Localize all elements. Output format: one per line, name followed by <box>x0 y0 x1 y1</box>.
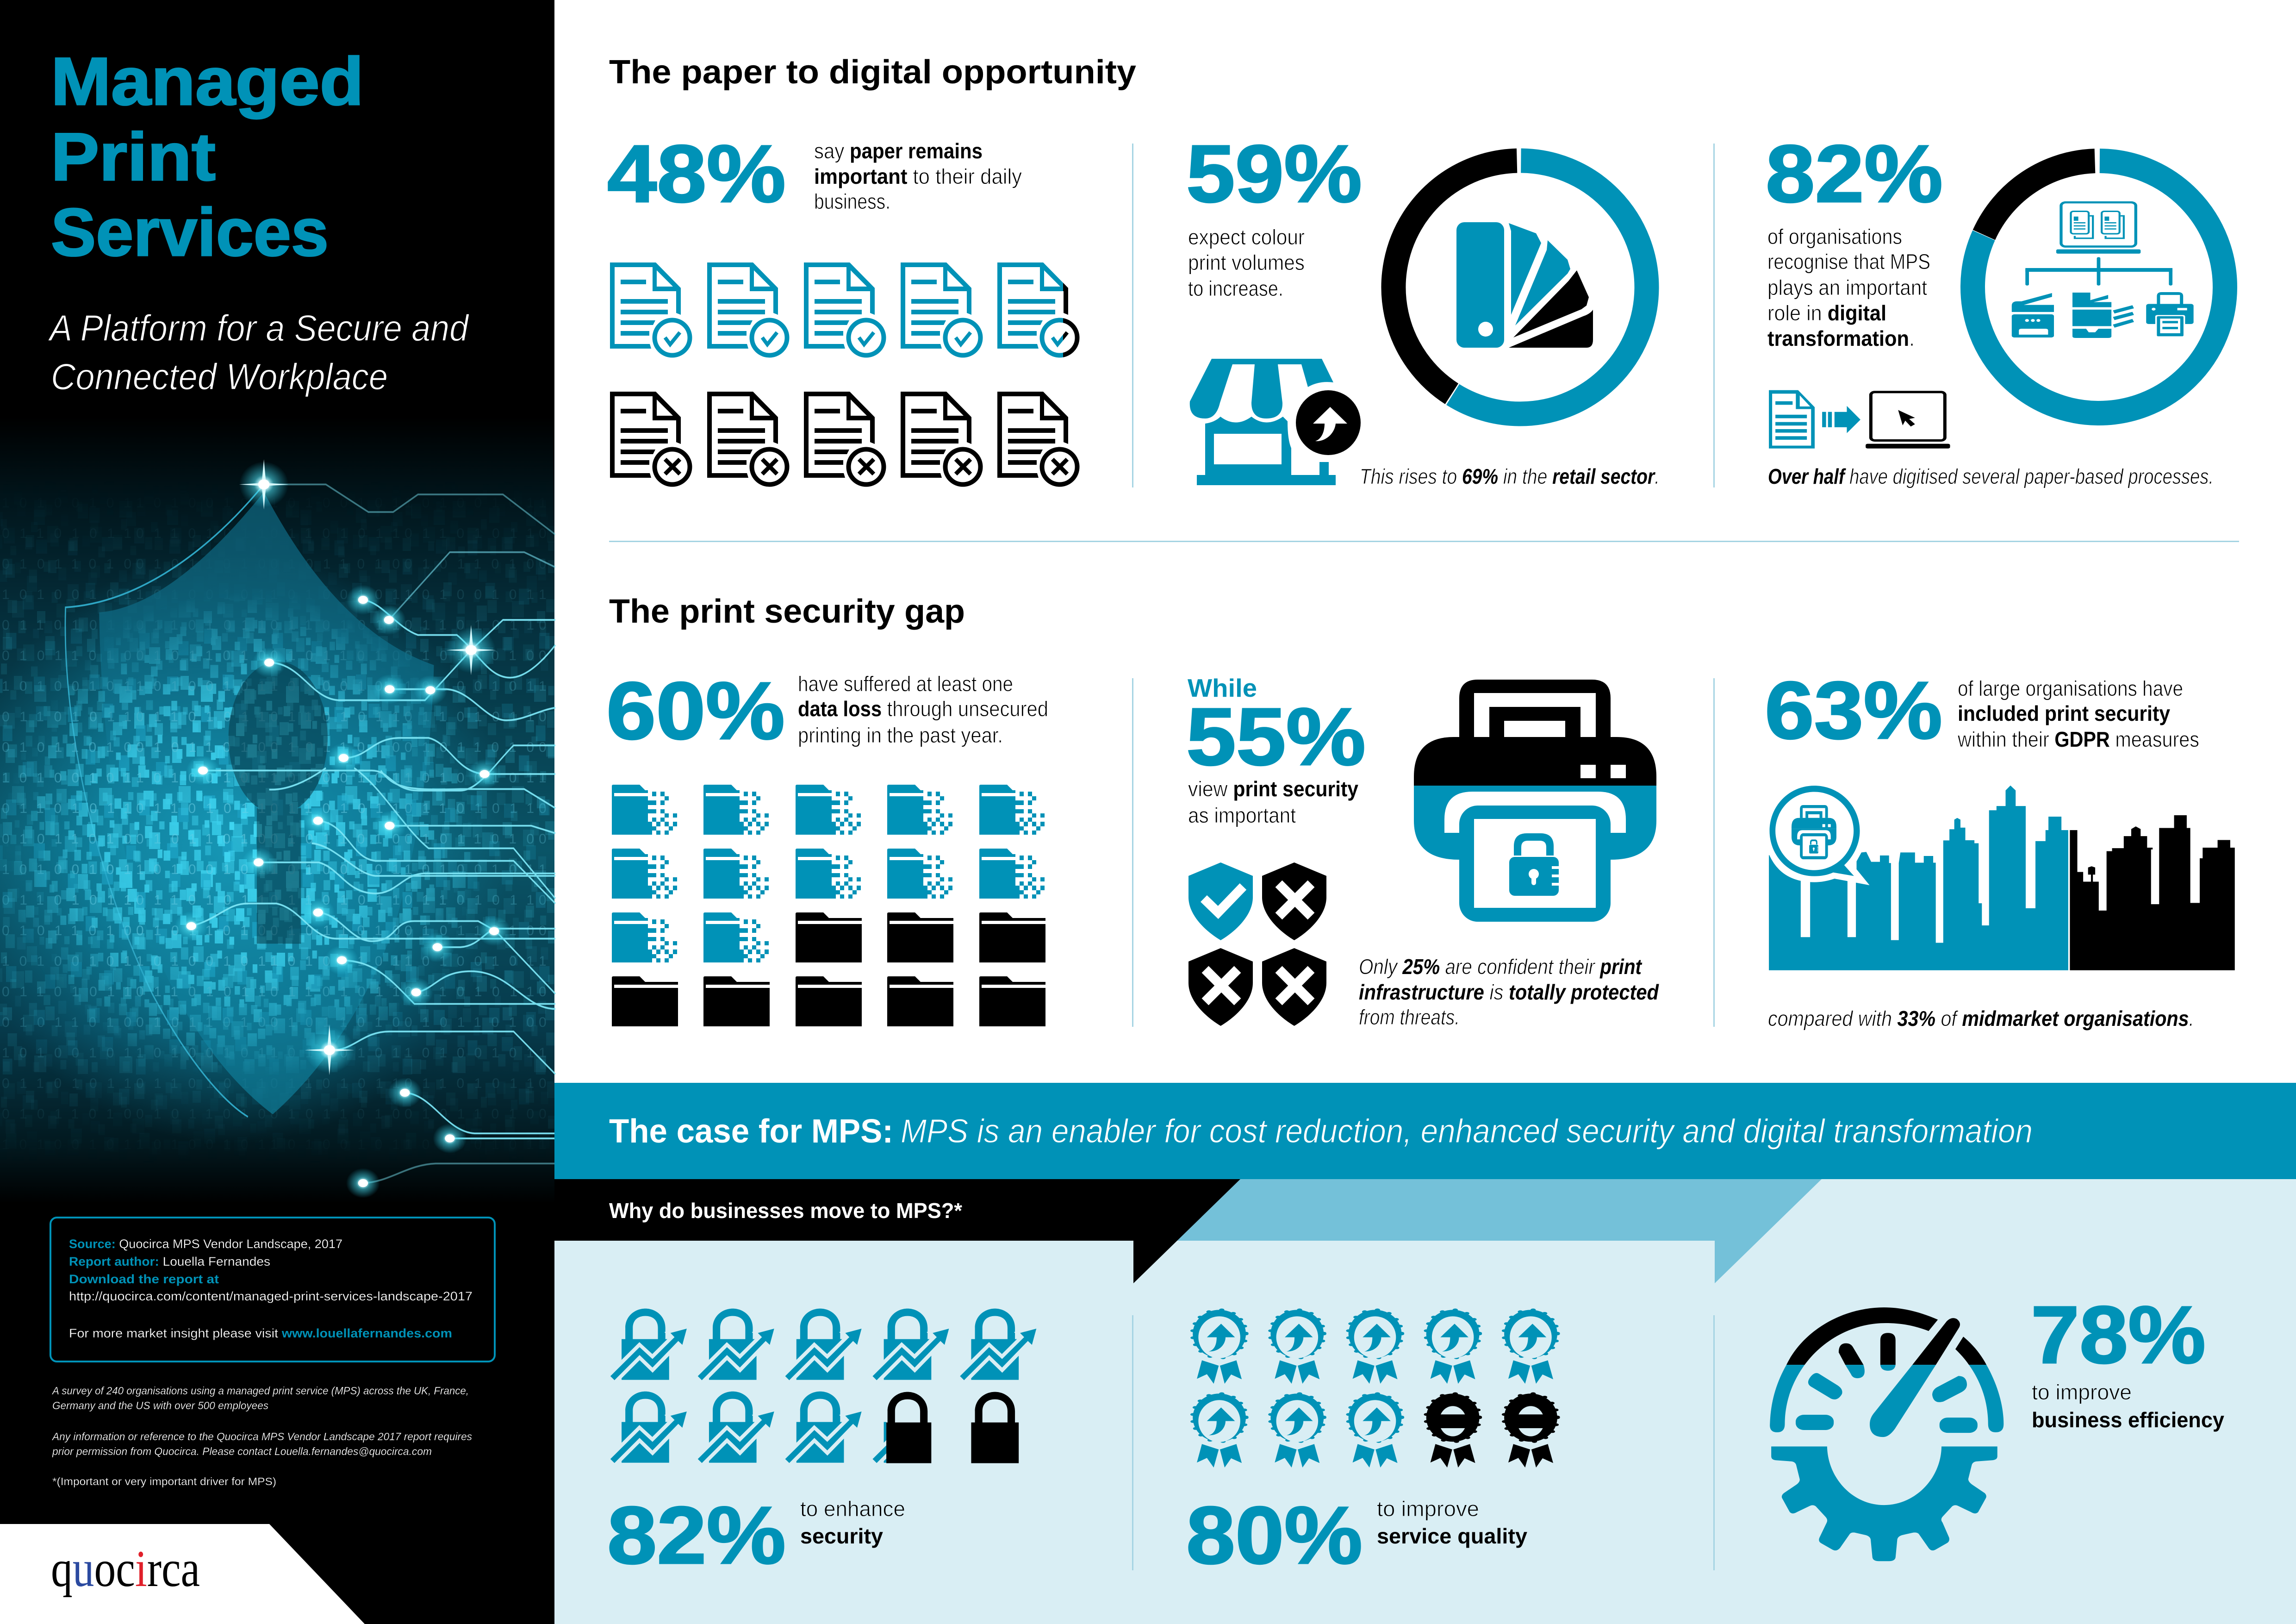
black tab: why do businesses move: Why do businesses move to MPS?* <box>609 1199 962 1223</box>
section heading: paper to digital: The paper to digital opportunity <box>609 54 1136 91</box>
survey notes: prior permission from Quocirca. Please contact Louella.fernandes@quocirca.com <box>52 1445 432 1457</box>
survey notes: Any information or reference to the Quocirca MPS Vendor Landscape 2017 report requires <box>51 1430 472 1443</box>
stat: 80% service quality <box>1186 1490 1527 1581</box>
stat: While 55% print security: While <box>1188 674 1257 702</box>
stat: 82% security: 82% <box>607 1490 786 1581</box>
logo panel <box>0 1524 365 1624</box>
stat: 78% business efficiency: 78% <box>2031 1290 2206 1380</box>
stat: 59% colour print volumes: to increase. <box>1188 276 1283 300</box>
stat: 82% digital transformation <box>1766 129 1943 350</box>
subtitle <box>48 307 469 397</box>
stat: 63% GDPR <box>1765 665 2199 756</box>
source box: Download the report at <box>69 1272 219 1286</box>
donut chart 82% with network devices <box>1932 120 2266 454</box>
lower light panel <box>554 1179 2296 1624</box>
skyline chart with speech bubble <box>1769 781 2235 970</box>
stat: 63% GDPR: 63% <box>1765 665 1942 756</box>
icon grid: documents with ticks and crosses <box>610 262 1077 484</box>
stat: 82% digital transformation: 82% <box>1766 129 1943 219</box>
caption: retail sector: This rises to 69% in the retail sector. <box>1360 464 1660 488</box>
stat: 80% service quality: service quality <box>1377 1524 1527 1548</box>
survey notes: A survey of 240 organisations using a managed print service (MPS) across the UK, France, <box>51 1385 469 1397</box>
stat: 59% colour print volumes: 59% <box>1186 129 1362 219</box>
stat: 82% digital transformation: transformation. <box>1767 326 1915 350</box>
survey notes <box>51 1385 472 1487</box>
stat: 60% data loss: printing in the past year. <box>798 723 1003 747</box>
stat: 59% colour print volumes <box>1186 129 1362 300</box>
banner: the case for MPS <box>554 1083 2296 1179</box>
source box: For more market insight please visit www.louellafernandes.com <box>69 1326 452 1340</box>
stat: 78% business efficiency <box>2031 1290 2224 1432</box>
stat: 82% digital transformation: recognise that MPS <box>1767 250 1930 274</box>
stat: While 55% print security: view print security <box>1188 777 1358 801</box>
stat: While 55% print security: as important <box>1188 803 1296 827</box>
subtitle: Connected Workplace <box>51 356 388 397</box>
banner: the case for MPS: MPS is an enabler for cost reduction, enhanced security and digital transformation <box>901 1113 2033 1150</box>
stat: 60% data loss: data loss through unsecured <box>798 697 1048 721</box>
banner: the case for MPS: The case for MPS: <box>609 1113 893 1150</box>
stat: 48% paper remains important: business. <box>814 189 890 213</box>
caption: only 25% confident: Only 25% are confident their print <box>1359 955 1642 979</box>
left panel background <box>0 0 554 1624</box>
source box: Report author: Louella Fernandes <box>69 1255 270 1268</box>
survey notes: Germany and the US with over 500 employees <box>52 1399 268 1412</box>
stat: 80% service quality: 80% <box>1186 1490 1363 1581</box>
caption: only 25% confident <box>1359 955 1659 1029</box>
stat: 63% GDPR: within their GDPR measures <box>1957 727 2199 751</box>
stat: 82% security: to enhance <box>800 1497 905 1521</box>
icon: document to laptop <box>1769 390 1950 449</box>
stat: 82% digital transformation: plays an important <box>1767 275 1927 300</box>
cyber security shield illustration <box>0 417 555 1204</box>
title: Managed Print Services: Services <box>51 194 329 270</box>
icon grid: rosettes <box>1193 1310 1557 1468</box>
stat: 48% paper remains important <box>607 129 1022 219</box>
stat: 82% security: security <box>800 1524 883 1548</box>
stat: While 55% print security: 55% <box>1186 692 1366 782</box>
section heading: print security gap: The print security gap <box>609 593 965 630</box>
stat: 48% paper remains important: important to their daily <box>814 164 1022 188</box>
caption: over half digitised: Over half have digitised several paper-based processes. <box>1768 464 2214 488</box>
icon: speedometer and gear <box>1770 1307 2004 1561</box>
icon grid: folders <box>612 785 1045 1026</box>
icon grid: padlocks <box>610 1309 1036 1463</box>
logo panel: quocirca <box>51 1540 200 1598</box>
stat: 60% data loss: have suffered at least one <box>798 672 1013 696</box>
stat: 63% GDPR: of large organisations have <box>1958 676 2183 700</box>
ribbon tab <box>1177 1179 1822 1283</box>
stat: 78% business efficiency: to improve <box>2032 1380 2132 1404</box>
source box: http://quocirca.com/content/managed-print-services-landscape-2017 <box>69 1289 473 1303</box>
caption: midmarket comparison: compared with 33% of midmarket organisations. <box>1768 1006 2194 1031</box>
stat: 82% digital transformation: role in digital <box>1767 301 1886 325</box>
icon group: shields <box>1188 862 1326 1026</box>
title: Managed Print Services <box>51 44 364 270</box>
stat: While 55% print security <box>1186 674 1366 827</box>
stat: 82% digital transformation: of organisations <box>1767 225 1902 249</box>
caption: only 25% confident: from threats. <box>1359 1005 1460 1029</box>
stat: 48% paper remains important: say paper remains <box>814 139 983 163</box>
black tab: why do businesses move <box>554 1179 1240 1283</box>
stat: 60% data loss: 60% <box>606 666 785 756</box>
title: Managed Print Services: Print <box>51 119 216 194</box>
stat: 60% data loss <box>606 666 1048 756</box>
stat: 48% paper remains important: 48% <box>607 129 786 219</box>
stat: 80% service quality: to improve <box>1377 1497 1479 1521</box>
caption: only 25% confident: infrastructure is totally protected <box>1359 980 1659 1004</box>
survey notes: *(Important or very important driver for MPS) <box>52 1475 276 1487</box>
stat: 63% GDPR: included print security <box>1958 701 2170 725</box>
stat: 78% business efficiency: business efficiency <box>2032 1408 2224 1432</box>
stat: 59% colour print volumes: expect colour <box>1188 225 1305 249</box>
donut chart 59% with swatch fan icon <box>1345 112 1695 462</box>
icon: secure printer <box>1414 680 1656 922</box>
stat: 82% security <box>607 1490 905 1581</box>
subtitle: A Platform for a Secure and <box>48 307 469 349</box>
source box: Source: Quocirca MPS Vendor Landscape, 2017 <box>69 1237 342 1251</box>
source box <box>50 1218 495 1362</box>
stat: 59% colour print volumes: print volumes <box>1188 250 1305 275</box>
icon: store with growth arrow <box>1190 359 1361 485</box>
title: Managed Print Services: Managed <box>51 44 364 119</box>
